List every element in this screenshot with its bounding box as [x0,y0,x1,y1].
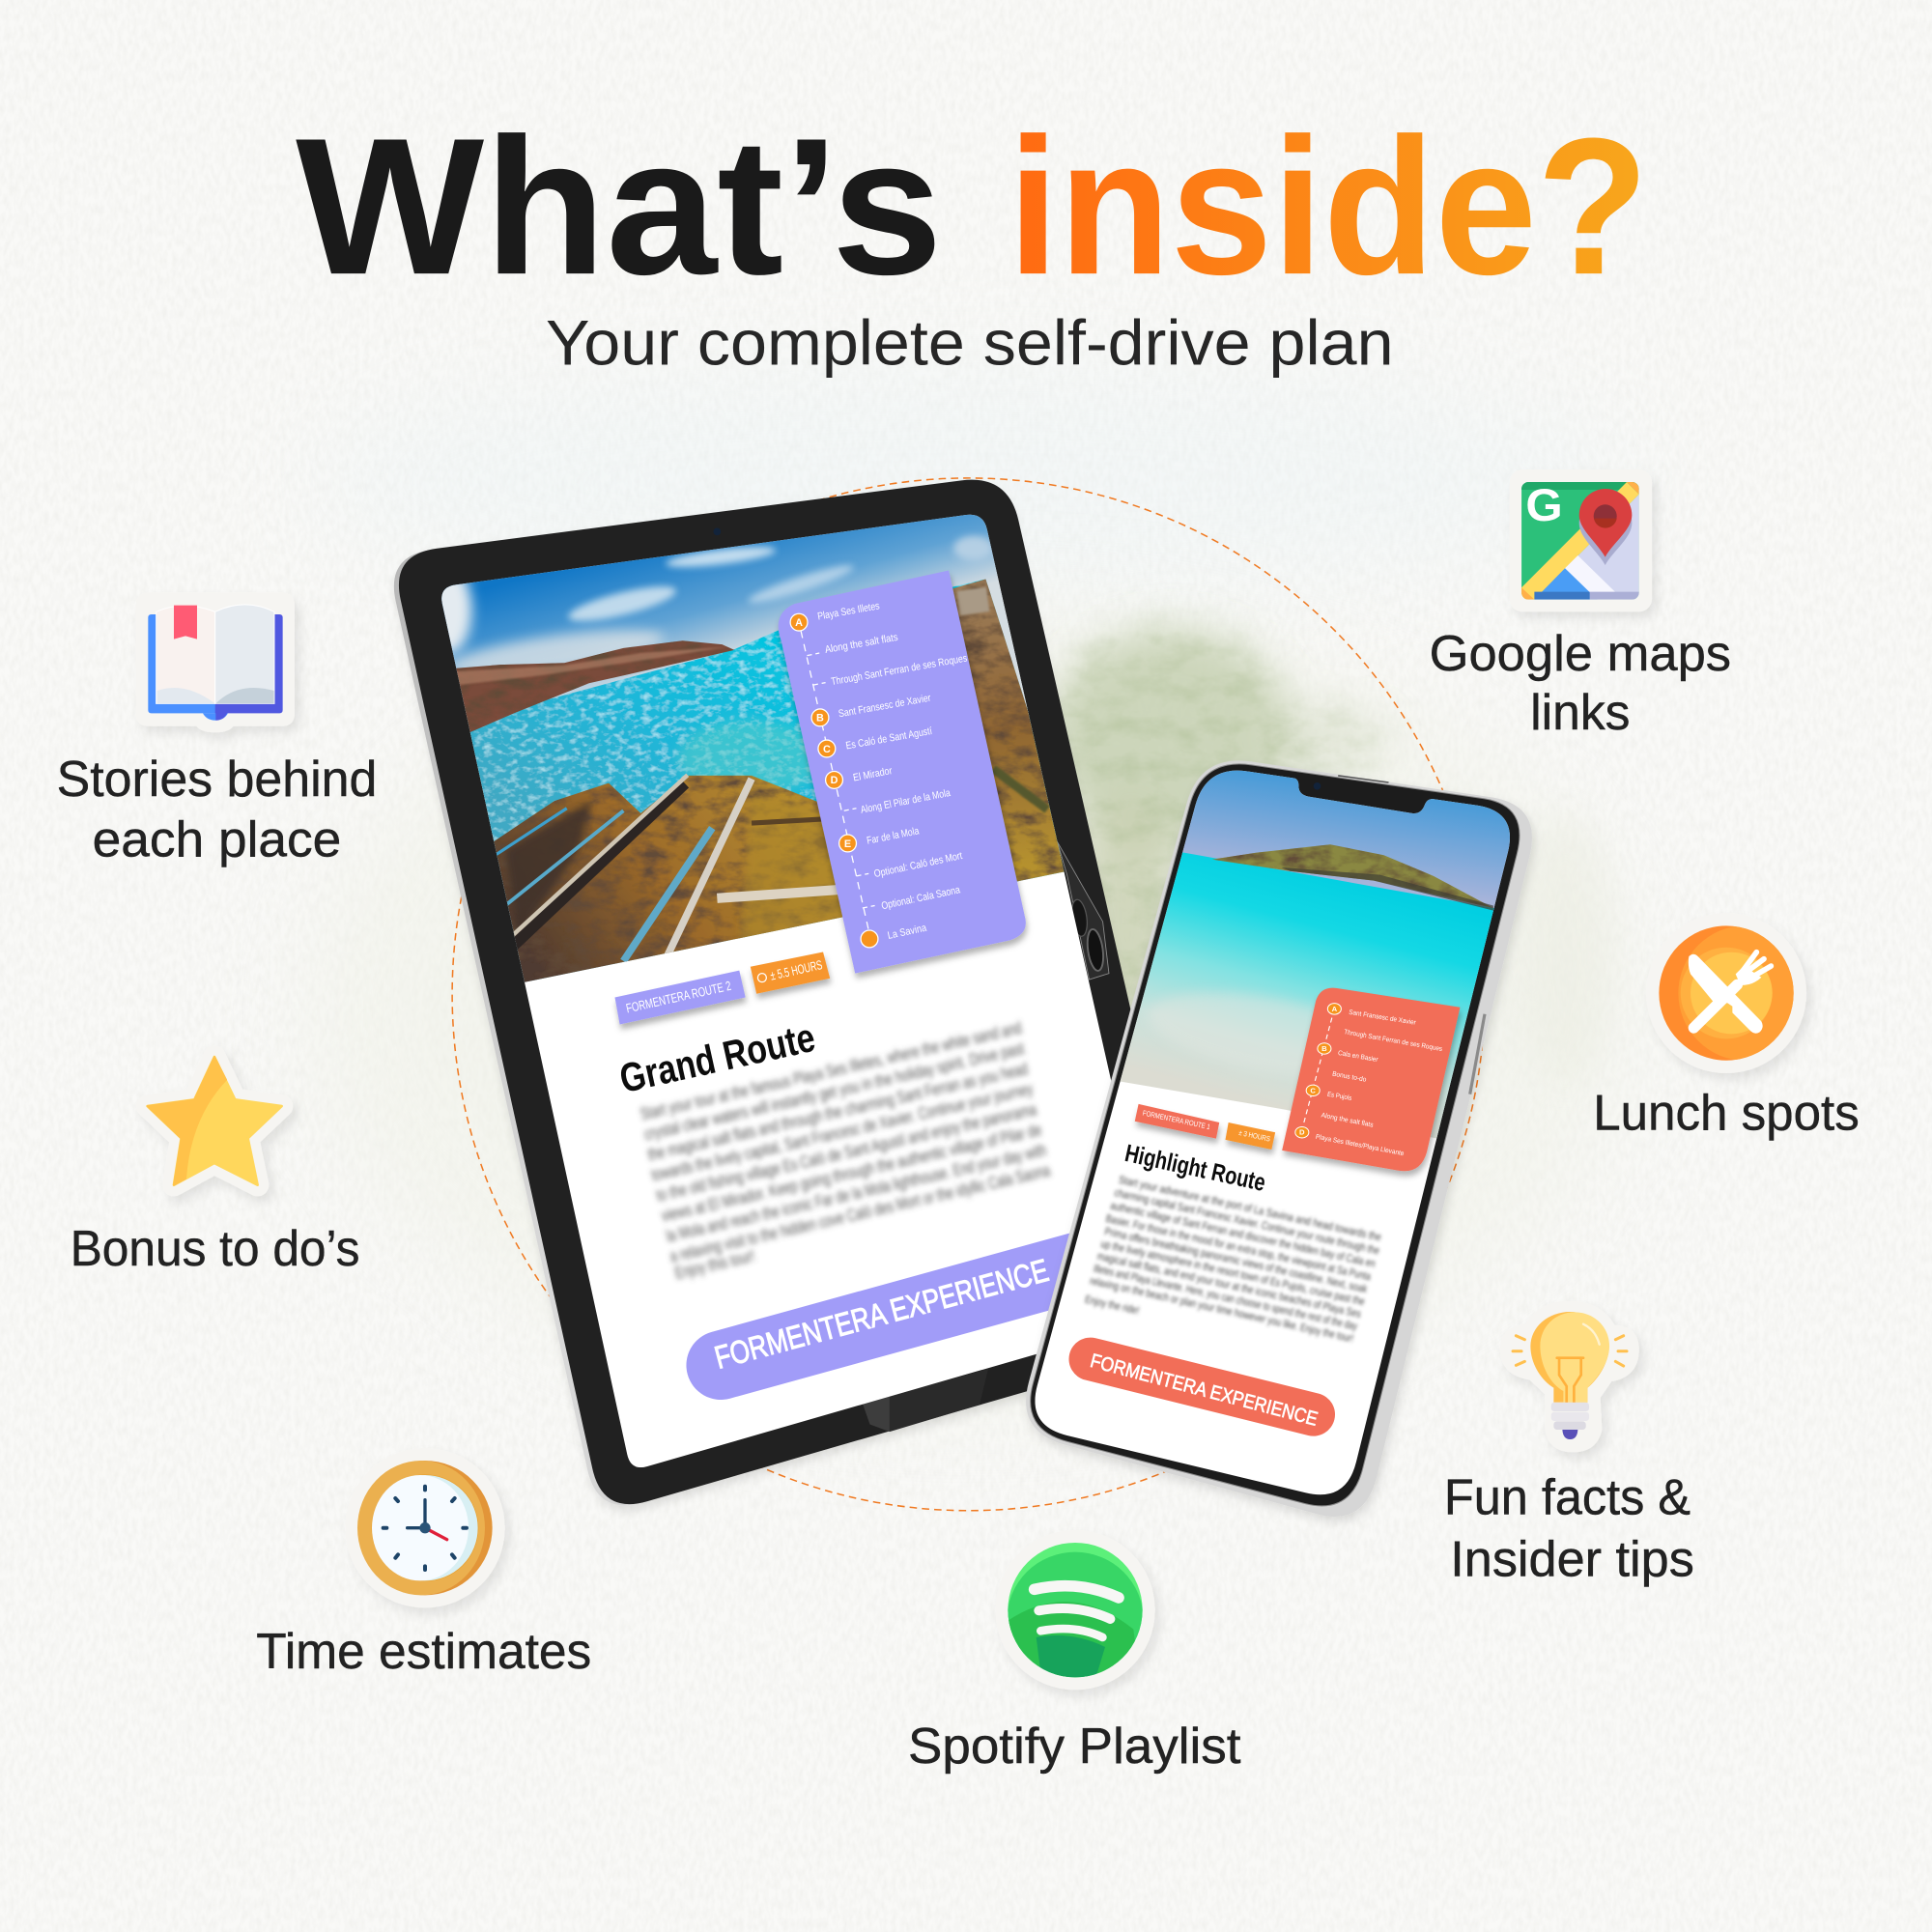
faded island background watercolor [308,370,1638,1405]
tablet blurred body text: Start your tour at the famous Playa Ses Illetes, where the white sand and [639,1018,1024,1123]
route panel: Playa Ses Illetes [816,600,881,623]
route panel: A [795,617,803,629]
tablet blurred body text: Enjoy this tour! [673,1246,756,1283]
label: spotify: Spotify Playlist [908,1719,1241,1775]
phone mockup [1010,752,1540,1517]
icon: clock [345,1448,505,1607]
phone blurred body text: authentic village of Sant Ferran and discover the hidden bay of Cala en [1109,1200,1377,1270]
phone route panel: Through Sant Ferran de ses Roques [1344,1029,1443,1053]
tablet button: FORMENTERA EXPERIENCE [711,1253,1052,1377]
phone route panel [1282,988,1460,1171]
tablet hours tag: ± 5.5 HOURS [769,957,824,983]
label: google maps: Google maps [1430,626,1731,682]
route panel: Far de la Mola [866,825,921,847]
phone blurred body text: magical salt flats, and end your tour at the iconic beaches of Playa Ses [1096,1251,1362,1321]
route panel: Through Sant Ferran de ses Roques [830,652,969,688]
dashed orange circle [452,478,1485,1511]
right rocks [952,580,1065,881]
phone route panel: Es Pujols [1326,1092,1352,1102]
foreground rocks [493,776,850,985]
route panel: C [823,744,831,755]
label: fun facts [1444,1470,1694,1587]
phone route panel: D [1299,1128,1305,1137]
phone photo [1115,752,1528,1140]
route panel: E [844,838,851,850]
label: google maps: links [1530,685,1630,741]
route panel [779,571,1026,974]
phone route panel: B [1321,1044,1327,1053]
tablet hours tag [751,952,830,994]
title: What’s [296,98,943,315]
icon: google maps [1510,469,1652,611]
phone blurred body text: Basier. For those in the mood for an extra stop, the viewpoint at Sa Punta [1104,1213,1372,1283]
far rocks [456,640,734,732]
icon: open book [136,592,295,732]
tablet heading: Grand Route [615,1014,819,1101]
phone screen [1010,752,1540,1516]
icon: light bulb [1500,1301,1639,1452]
phone blurred body text: Start your adventure at the port of La Savina and head towards the [1118,1175,1382,1244]
title [296,98,1649,315]
icon: star [148,1057,282,1185]
phone route tag [1135,1104,1219,1139]
phone route panel: Cala en Basier [1337,1050,1379,1064]
phone route panel: Sant Fransesc de Xavier [1349,1009,1417,1027]
tablet blurred body text: crystal clear waters will instantly get you in the holiday spirit. Drive past [642,1038,1026,1144]
route panel: Sant Fransesc de Xavier [838,693,932,720]
phone blurred body text [1084,1175,1382,1345]
tablet blurred body text: views at El Mirador. Keep going through the authentic village of Pilar de [660,1120,1043,1226]
tablet blurred body text: towards the lively capital, Sant Francesc de Xavier. Continue your journey [649,1079,1035,1184]
tablet route tag: FORMENTERA ROUTE 2 [625,979,732,1015]
subtitle: Your complete self-drive plan [546,308,1394,380]
label: stories [57,752,377,867]
tablet photo [441,514,1065,982]
icon: fork and knife [1646,913,1813,1073]
tablet blurred body text: to the old fishing village Es Caló de Sant Agustí and enjoy the panorama [655,1099,1038,1206]
phone blurred body text: relaxing on the beach or plan your time however you like. Enjoy the tour! [1089,1275,1354,1345]
phone route panel: Along the salt flats [1321,1112,1375,1129]
route panel: Along El Pilar de la Mola [860,787,952,816]
label: time estimates: Time estimates [256,1624,591,1680]
tablet mockup [394,480,1198,1505]
title: inside? [1008,98,1649,315]
route panel: Optional: Caló des Mort [873,850,963,880]
label: stories: each place [93,811,341,867]
route panel: Optional: Cala Saona [880,884,962,912]
phone blurred body text: charming capital Sant Francesc Xavier. Continue your route through the [1113,1187,1380,1258]
route panel: D [831,775,838,786]
label: stories: Stories behind [57,752,377,808]
label: fun facts: Insider tips [1450,1531,1694,1587]
phone hours tag [1225,1122,1275,1150]
phone blurred body text: Prima offers breathtaking panoramic views of the coastline. Next, soak [1103,1226,1368,1295]
tablet blurred body text [639,1018,1052,1283]
tablet blurred body text: the magical salt flats and through the charming Sant Ferran as you head [646,1059,1030,1164]
phone route panel: A [1332,1005,1338,1013]
route panel: La Savina [887,922,928,942]
phone route panel: C [1310,1086,1316,1094]
phone blurred body text: up the lively atmosphere in the resort town of Es Pujols, cruise past the [1099,1238,1366,1308]
phone hours tag: ± 3 HOURS [1237,1128,1271,1144]
tablet route tag [614,971,746,1024]
tablet screen [441,514,1111,1468]
water [446,579,1084,985]
phone route panel: Bonus to-do [1331,1071,1367,1084]
phone route panel: Playa Ses Illetes/Playa Llevante [1315,1134,1405,1157]
phone button: FORMENTERA EXPERIENCE [1088,1350,1320,1431]
icon: spotify [995,1530,1155,1690]
label: fun facts: Fun facts & [1444,1470,1690,1526]
route panel: El Mirador [852,765,894,784]
route panel: B [816,713,824,724]
phone route tag: FORMENTERA ROUTE 1 [1142,1108,1211,1131]
tablet blurred body text: la Mola and reach the iconic Far de la Mola lighthouse. End your day with [665,1140,1048,1246]
icon: google maps: G [1525,480,1563,531]
label: lunch spots: Lunch spots [1593,1086,1860,1142]
label: bonus: Bonus to do’s [71,1221,359,1277]
label: google maps [1430,626,1731,741]
phone blurred body text: Illetes and Playa Llevante. Here, you can choose to spend the rest of the day [1093,1264,1358,1333]
phone heading: Highlight Route [1122,1140,1268,1197]
phone blurred body text: Enjoy the ride! [1084,1293,1140,1318]
route panel: Es Caló de Sant Agustí [845,725,933,752]
tablet blurred body text: a relaxing visit to the hidden cove Caló des Mort or the idyllic Cala Saona [668,1160,1052,1266]
route panel: Along the salt flats [824,632,899,656]
